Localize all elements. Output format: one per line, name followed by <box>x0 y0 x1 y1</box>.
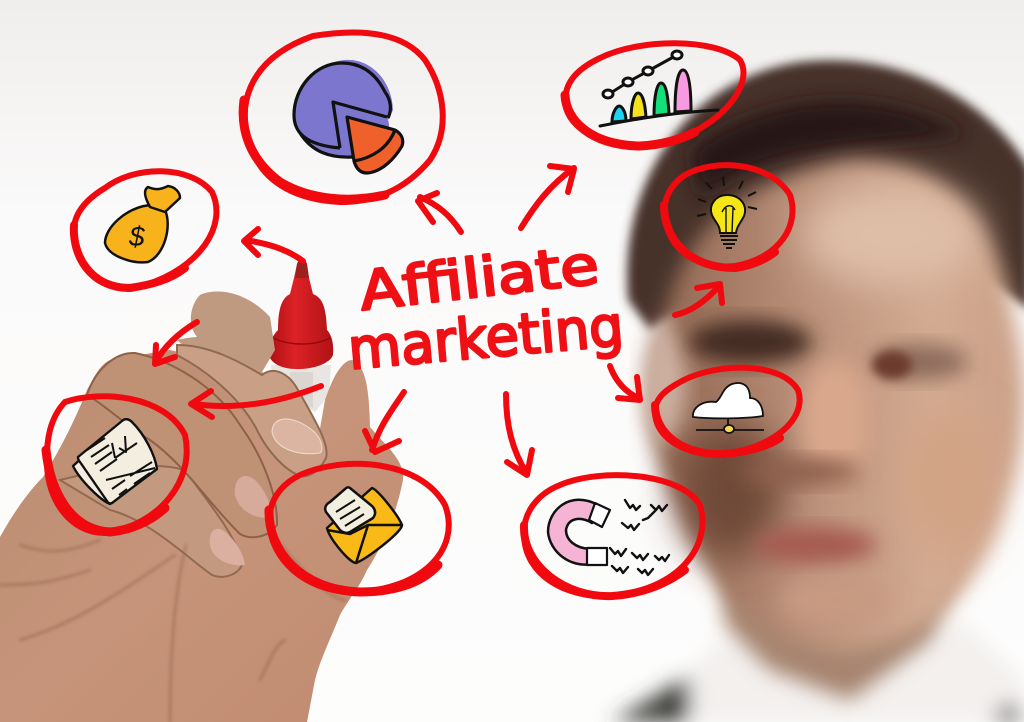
letter <box>325 487 375 533</box>
icon: magnet and birds <box>548 500 669 575</box>
thumb and palm silhouette <box>0 350 403 722</box>
icon: light bulb <box>697 177 757 248</box>
hand holding marker <box>0 292 403 722</box>
face <box>650 160 1024 652</box>
hair <box>627 60 1024 330</box>
marker <box>269 260 333 412</box>
title line 2: marketing <box>346 294 626 383</box>
arrow to envelope <box>365 392 404 452</box>
circle: envelope <box>269 464 449 592</box>
forehead highlight <box>800 185 980 285</box>
dark hair band <box>690 101 970 200</box>
icon: newspaper <box>73 419 157 504</box>
title line 1: Affiliate <box>356 233 602 323</box>
circle: money bag <box>74 171 216 288</box>
circle: light bulb <box>664 165 793 268</box>
arrow upper left <box>155 322 197 364</box>
neck <box>720 560 960 700</box>
icon: pie chart <box>294 60 403 173</box>
marker cap <box>269 260 333 369</box>
index second segment <box>177 345 327 476</box>
pie back <box>294 60 393 158</box>
index first segment <box>177 292 275 385</box>
icon: bar chart <box>600 51 718 126</box>
circle: pie chart <box>243 32 443 202</box>
circle: cloud <box>655 368 800 454</box>
arrow to newspaper <box>191 386 321 417</box>
dollar sign: $ <box>128 221 145 252</box>
arrow to money bag <box>244 229 303 261</box>
pie outline <box>294 63 390 157</box>
arrows <box>155 166 722 475</box>
wedge <box>347 117 403 173</box>
ring finger <box>60 466 243 577</box>
magnet <box>548 500 598 565</box>
arrow to magnet <box>506 394 532 475</box>
blurred man in background <box>612 60 1024 722</box>
icon: envelope <box>325 487 402 563</box>
circle: newspaper <box>46 396 187 533</box>
title: Affiliate marketing <box>346 233 626 383</box>
fingernails <box>272 419 322 454</box>
marker barrel <box>271 365 331 412</box>
middle finger <box>87 353 277 537</box>
red circles <box>46 32 800 596</box>
arrow to cloud <box>610 366 640 400</box>
icon: cloud <box>693 383 764 433</box>
arrow to pie chart <box>418 193 461 232</box>
hand creases <box>0 530 345 722</box>
ear side <box>643 325 687 445</box>
circle: bar chart <box>565 43 743 146</box>
arrow to bar chart <box>521 166 574 228</box>
eyes, cheeks, mouth <box>678 320 995 624</box>
flock of birds <box>610 500 669 575</box>
arrow to light bulb <box>675 284 722 315</box>
shirt and suit <box>612 620 1024 722</box>
icon: money bag <box>105 186 180 262</box>
circle: magnet <box>524 475 702 596</box>
